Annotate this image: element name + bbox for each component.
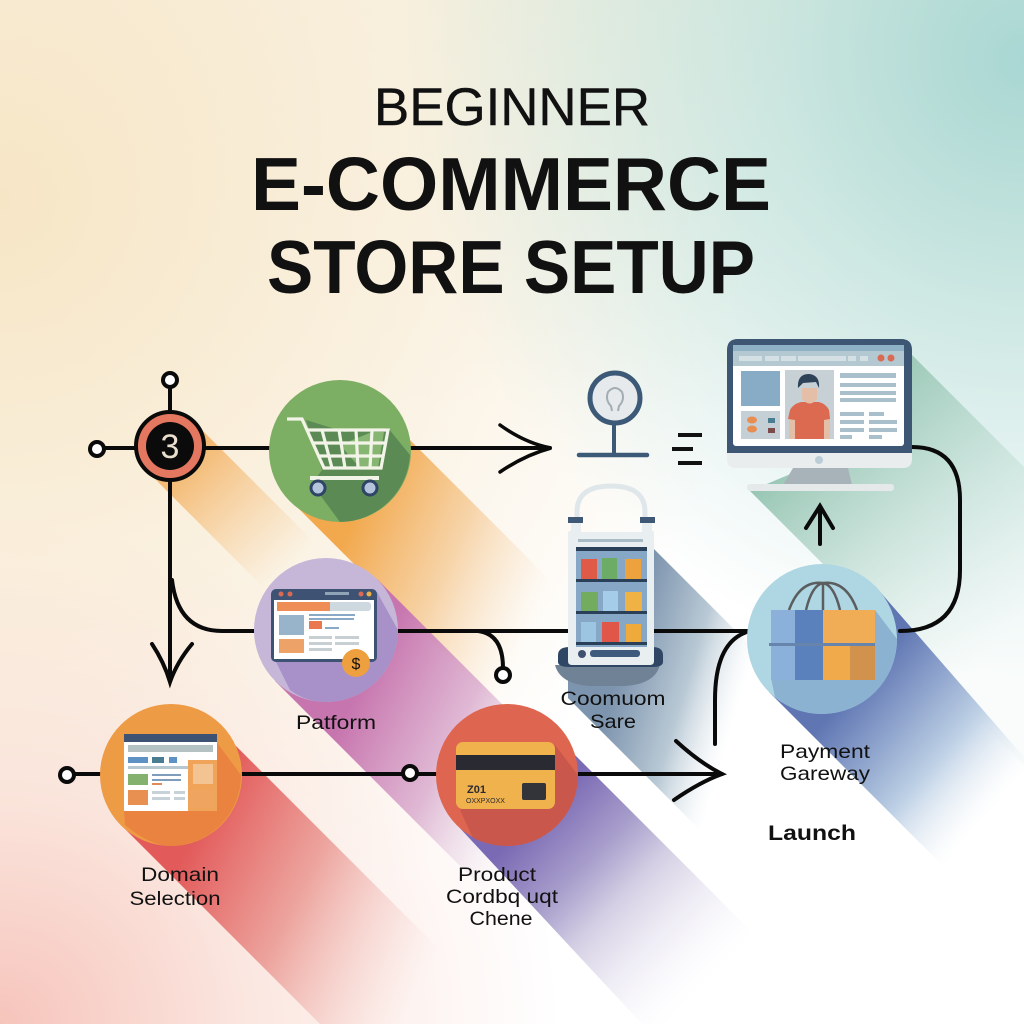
label: store: Sare	[590, 711, 636, 733]
shadow: platform circle	[275, 579, 680, 1006]
shadow: node	[146, 422, 394, 670]
title: E-COMMERCE	[251, 142, 771, 226]
shadow: bag	[769, 586, 1024, 947]
icon: store	[555, 486, 663, 686]
shadow: card circle	[457, 728, 844, 1024]
label: payment gateway: Gareway	[780, 763, 870, 785]
label: product catalog	[446, 864, 559, 930]
node: step 3	[90, 373, 204, 480]
label: product catalog: Chene	[470, 908, 532, 930]
title	[251, 78, 771, 309]
icon: domain circle	[100, 704, 242, 846]
icon: card circle	[436, 704, 578, 846]
label: payment gateway: Payment	[780, 741, 871, 763]
label: platform: Patform	[296, 712, 376, 734]
shadow: monitor	[750, 355, 1024, 765]
label: launch: Launch	[768, 822, 856, 845]
label: store	[560, 688, 666, 733]
label: product catalog: Product	[458, 864, 537, 886]
title: BEGINNER	[374, 78, 650, 137]
connector lines	[73, 386, 960, 800]
icon: bag circle	[747, 564, 897, 714]
icon: platform circle	[254, 558, 398, 702]
shadow: domain circle	[121, 725, 514, 1024]
icon: platform circle: $	[352, 656, 361, 673]
shadow: store	[568, 549, 900, 930]
icon: card circle: Z01	[467, 784, 486, 796]
icon: monitor	[727, 339, 912, 491]
label: domain selection: Domain	[141, 864, 219, 886]
shadow: cart circle	[290, 408, 690, 750]
node: step 3: 3	[161, 428, 179, 466]
label: store: Coomuom	[560, 688, 666, 710]
title: STORE SETUP	[267, 225, 755, 309]
label: domain selection	[130, 864, 220, 910]
icon: lightbulb pin	[579, 373, 702, 463]
icon: cart circle	[269, 380, 411, 522]
label: domain selection: Selection	[130, 888, 220, 910]
small nodes	[60, 668, 510, 782]
label: payment gateway	[780, 741, 871, 785]
label: product catalog: Cordbq uqt	[446, 886, 559, 908]
icon: card circle: OXXPXOXX	[466, 798, 505, 805]
